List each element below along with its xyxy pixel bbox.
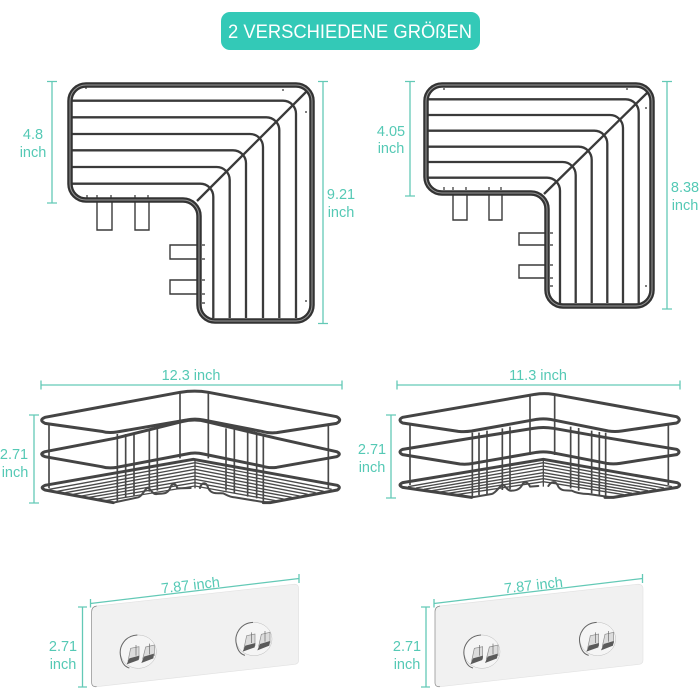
small basket side view bbox=[400, 394, 680, 497]
dimension: small basket height 2.71 inch: 2.71 bbox=[358, 442, 386, 458]
dimension: small panel height 2.71 inch: 2.71 bbox=[393, 639, 421, 655]
right suction hook bbox=[236, 622, 272, 656]
title badge: 2 VERSCHIEDENE GRÖßEN bbox=[228, 22, 472, 43]
large adhesive panel bbox=[92, 584, 299, 687]
dimension: small basket arm 4.05 inch: inch bbox=[378, 141, 404, 157]
dimension: small basket height 2.71 inch bbox=[358, 415, 396, 498]
right suction hook bbox=[580, 622, 616, 656]
dimension: large basket height 2.71 inch: inch bbox=[2, 465, 28, 481]
left suction hook bbox=[120, 635, 156, 668]
dimension: large basket width 12.3 inch: 12.3 inch bbox=[162, 368, 220, 384]
dimension: small panel height 2.71 inch: inch bbox=[394, 657, 420, 673]
small basket top view bbox=[426, 85, 652, 306]
dimension: large panel height 2.71 inch: 2.71 bbox=[49, 639, 77, 655]
dimension: large basket width 12.3 inch bbox=[41, 368, 342, 390]
dimension: large basket side 9.21 inch: inch bbox=[328, 205, 354, 221]
dimension: large basket height 2.71 inch: 2.71 bbox=[0, 447, 28, 463]
dimension: large basket side 9.21 inch bbox=[318, 82, 355, 324]
dimension: small panel width 7.87 inch: 7.87 inch bbox=[503, 575, 564, 597]
dimension: large basket arm 4.8 inch bbox=[20, 82, 57, 203]
large basket top view bbox=[70, 85, 312, 321]
dimension: small basket side 8.38 inch bbox=[662, 82, 699, 309]
dimension: large basket arm 4.8 inch: inch bbox=[20, 145, 46, 161]
dimension: large panel width 7.87 inch bbox=[90, 574, 299, 608]
left suction hook bbox=[464, 635, 500, 668]
dimension: small panel height 2.71 inch bbox=[393, 607, 430, 687]
dimension: small basket width 11.3 inch: 11.3 inch bbox=[509, 368, 567, 384]
dimension: small panel width 7.87 inch bbox=[434, 574, 642, 608]
dimension: large basket side 9.21 inch: 9.21 bbox=[327, 187, 355, 203]
dimension: small basket width 11.3 inch bbox=[397, 368, 680, 390]
dimension: large panel height 2.71 inch bbox=[49, 607, 87, 687]
title badge bbox=[221, 12, 480, 50]
dimension: small basket side 8.38 inch: inch bbox=[672, 198, 698, 214]
dimension: large basket arm 4.8 inch: 4.8 bbox=[23, 127, 43, 143]
dimension: large panel height 2.71 inch: inch bbox=[50, 657, 76, 673]
dimension: small basket side 8.38 inch: 8.38 bbox=[671, 180, 699, 196]
large basket side view bbox=[42, 391, 340, 503]
dimension: small basket height 2.71 inch: inch bbox=[359, 460, 385, 476]
dimension: small basket arm 4.05 inch: 4.05 bbox=[377, 124, 405, 140]
dimension: small basket arm 4.05 inch bbox=[377, 82, 415, 196]
dimension: large panel width 7.87 inch: 7.87 inch bbox=[160, 575, 221, 597]
dimension: large basket height 2.71 inch bbox=[0, 415, 39, 503]
small adhesive panel bbox=[435, 584, 643, 687]
